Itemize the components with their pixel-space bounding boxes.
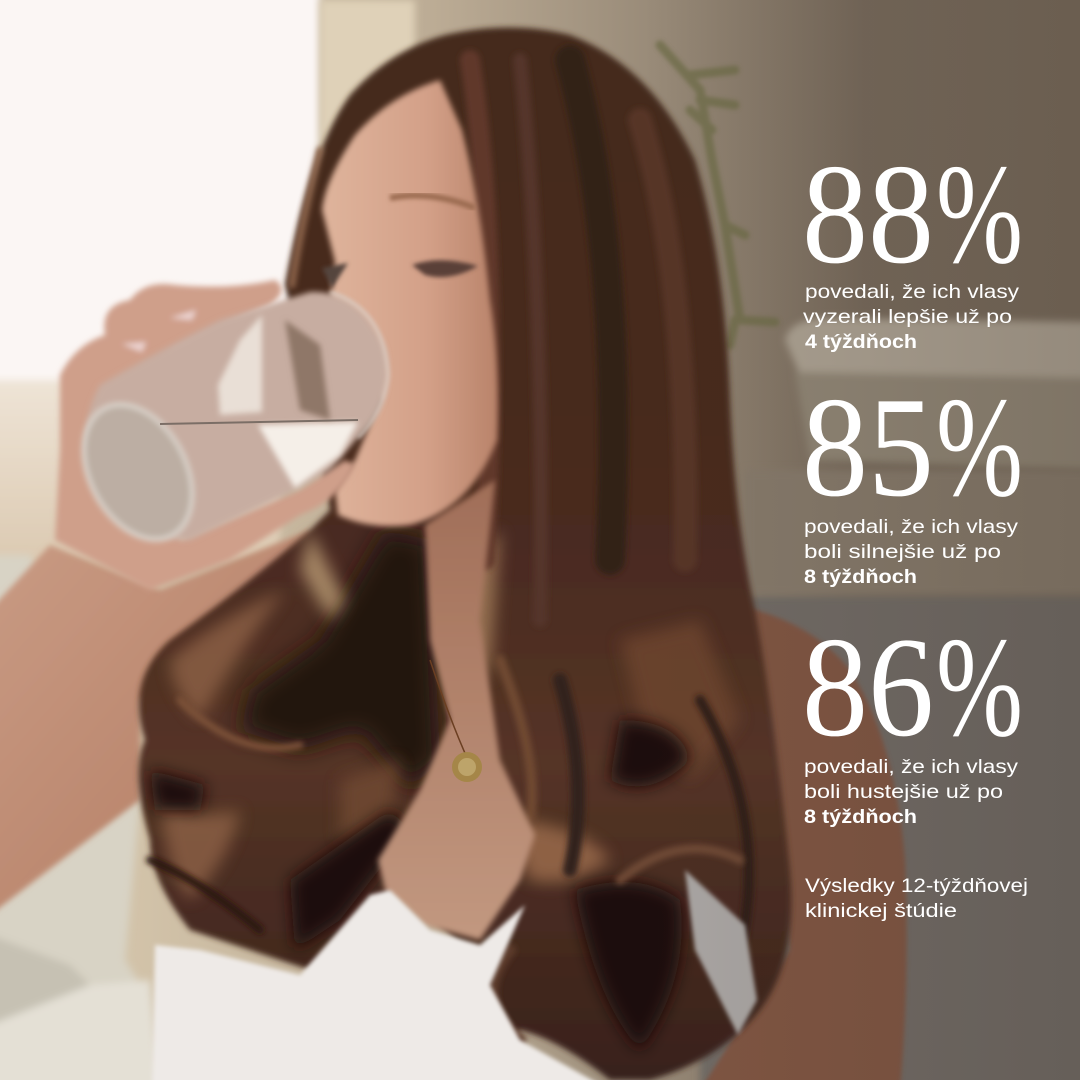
- stat 1: [802, 135, 1023, 353]
- hair strands: [150, 60, 749, 1040]
- stat 3: %: [936, 608, 1023, 766]
- necklace: [430, 660, 482, 782]
- stat 3: 8 týždňoch: [804, 806, 917, 828]
- shoulder right: [700, 605, 907, 1080]
- nails: [170, 310, 196, 320]
- right overlay: [640, 0, 1080, 1080]
- arm: [0, 530, 330, 915]
- hair: [139, 28, 791, 1080]
- far eye: [322, 263, 348, 288]
- furniture: shelf: [745, 470, 1080, 595]
- chest and neck: [378, 480, 535, 940]
- furniture: white vessel: [785, 318, 1080, 470]
- highlights: [258, 422, 358, 488]
- stat 3: povedali, že ich vlasy: [804, 756, 1018, 778]
- lower right wall: [700, 595, 1080, 1080]
- bottom ellipse: [62, 386, 214, 558]
- footnote: klinickej štúdie: [805, 900, 957, 922]
- stat 2: %: [936, 368, 1023, 526]
- stat 2: [802, 368, 1023, 588]
- stat 1: vyzerali lepšie už po: [803, 306, 1012, 328]
- hair dark mass left: [240, 530, 440, 790]
- stat 1: povedali, že ich vlasy: [805, 281, 1019, 303]
- stat 2: povedali, že ich vlasy: [804, 516, 1018, 538]
- stat 2: 85: [802, 368, 934, 526]
- stat 1: 4 týždňoch: [805, 331, 917, 353]
- hair dark curls: [150, 720, 690, 1050]
- sofa: [0, 555, 160, 1080]
- stat 3: boli hustejšie už po: [804, 781, 1003, 803]
- stat 3: 86: [802, 608, 934, 766]
- stat 2: 8 týždňoch: [804, 566, 917, 588]
- footnote: Výsledky 12-týždňovej: [805, 875, 1028, 897]
- plant: [660, 45, 775, 345]
- glass of water: [62, 292, 388, 558]
- stat 1: 88: [802, 135, 934, 293]
- stat 2: boli silnejšie už po: [804, 541, 1001, 563]
- window: [0, 0, 320, 560]
- stat 3: [802, 608, 1023, 828]
- footnote: [805, 875, 1028, 922]
- curtain: [320, 0, 415, 300]
- eye: [412, 260, 478, 277]
- top white: [152, 870, 757, 1080]
- hand: [55, 280, 355, 590]
- stat 1: %: [936, 135, 1023, 293]
- eyebrow: [390, 196, 475, 208]
- hair lights: [160, 530, 740, 900]
- face: [322, 80, 498, 526]
